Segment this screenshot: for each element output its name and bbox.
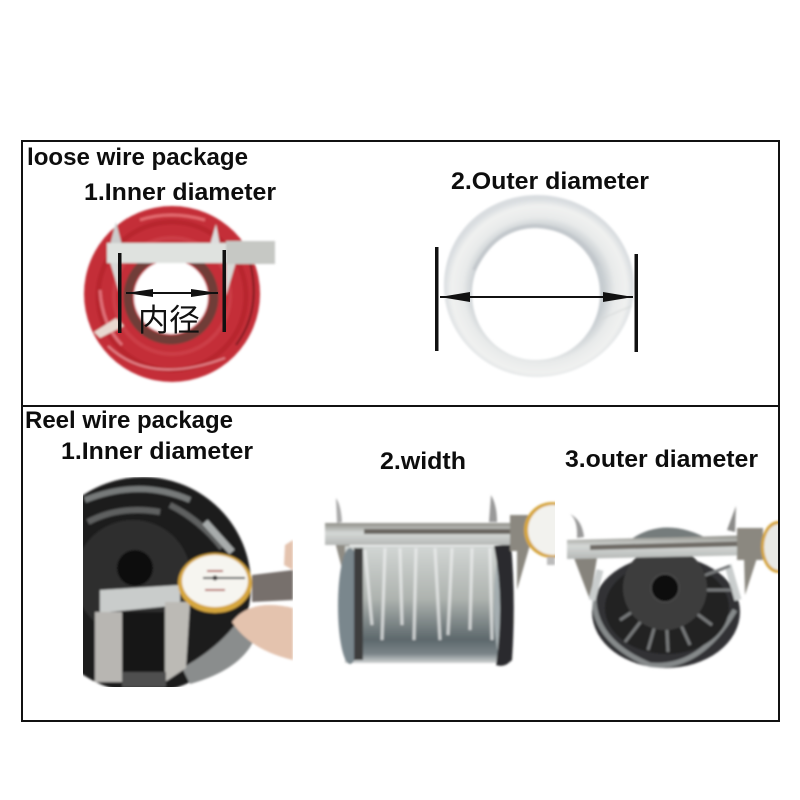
photo: white wire coil — [435, 195, 638, 377]
photo: red wire coil with caliper — [84, 206, 275, 382]
photo: reel inner diameter measurement — [83, 477, 293, 687]
heading: reel wire package: Reel wire package — [25, 407, 233, 434]
photo: reel outer diameter measurement — [567, 506, 795, 668]
inner diameter markers — [118, 250, 226, 333]
caption: inner diameter in Chinese: 内径 — [138, 303, 200, 338]
label: reel inner diameter: 1.Inner diameter — [61, 438, 253, 465]
label: loose inner diameter: 1.Inner diameter — [84, 179, 276, 206]
photo: reel width measurement — [325, 495, 580, 666]
panel: reel wire package — [22, 406, 795, 721]
infographic canvas — [21, 140, 780, 722]
outer diameter markers — [435, 247, 638, 352]
label: reel outer diameter: 3.outer diameter — [565, 446, 758, 473]
label: reel width: 2.width — [380, 448, 466, 475]
heading: loose wire package: loose wire package — [27, 144, 248, 171]
label: loose outer diameter: 2.Outer diameter — [451, 168, 649, 195]
panel: loose wire package — [22, 141, 779, 406]
